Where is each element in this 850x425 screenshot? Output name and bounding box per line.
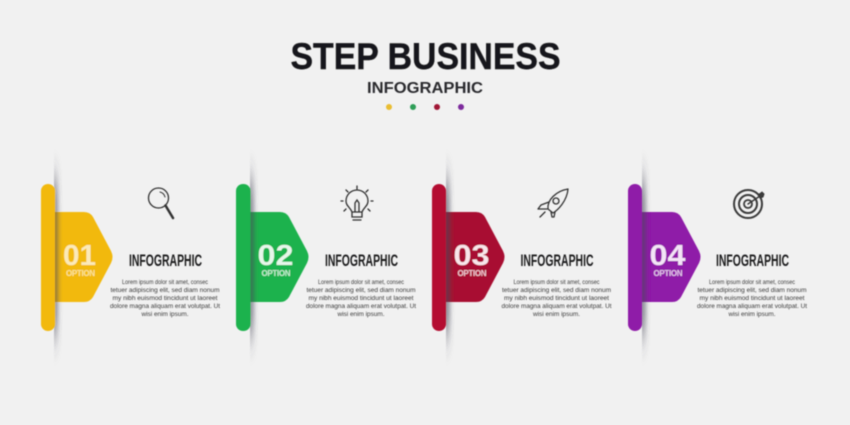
vertical bar — [628, 184, 642, 331]
heading: INFOGRAPHIC — [716, 252, 789, 270]
body text: tetuer adipiscing elit, sed diam nonum — [110, 287, 220, 294]
body text: Lorem ipsum dolor sit amet, consec — [514, 279, 600, 286]
arrow tab — [446, 212, 504, 302]
icon: light bulb — [341, 186, 373, 220]
body text — [502, 279, 612, 318]
body text: Lorem ipsum dolor sit amet, consec — [122, 279, 208, 286]
infographic canvas — [40, 42, 808, 356]
panel: step 01 — [41, 180, 220, 335]
option label: OPTION — [262, 269, 291, 278]
body text: my nibh euismod tincidunt ut laoreet — [504, 295, 609, 302]
title block — [290, 36, 560, 110]
fold shadow — [246, 180, 254, 335]
heading: INFOGRAPHIC — [520, 252, 594, 270]
heading: INFOGRAPHIC — [129, 252, 202, 270]
body text: my nibh euismod tincidunt ut laoreet — [308, 295, 414, 302]
body text: wisi enim ipsum. — [727, 311, 776, 318]
number: 04 — [650, 240, 686, 272]
heading: INFOGRAPHIC — [325, 252, 398, 270]
icon: rocket — [538, 189, 568, 217]
body text: tetuer adipiscing elit, sed diam nonum — [502, 287, 611, 294]
title: STEP BUSINESS — [290, 36, 560, 77]
body text: wisi enim ipsum. — [336, 311, 385, 318]
fold shadow — [442, 180, 450, 335]
panel: step 02 — [236, 180, 416, 335]
body text — [306, 279, 416, 318]
body text: wisi enim ipsum. — [532, 311, 580, 318]
subtitle: INFOGRAPHIC — [367, 80, 483, 97]
vertical bar — [41, 184, 55, 331]
body text: Lorem ipsum dolor sit amet, consec — [709, 279, 795, 286]
vertical bar — [236, 184, 250, 331]
panel: step 03 — [432, 180, 612, 335]
arrow tab — [642, 212, 700, 302]
icon: magnifier — [148, 188, 173, 218]
fold shadow — [638, 180, 646, 335]
arrow tab — [250, 212, 308, 302]
number: 01 — [63, 240, 96, 272]
body text — [110, 279, 220, 318]
colour dots — [386, 104, 464, 110]
body text: wisi enim ipsum. — [140, 311, 189, 318]
vertical bar — [432, 184, 446, 331]
fold shadow — [50, 180, 58, 335]
panel: step 04 — [628, 180, 807, 335]
body text — [697, 279, 807, 318]
number: 03 — [454, 240, 490, 272]
body text: Lorem ipsum dolor sit amet, consec — [318, 279, 404, 286]
body text: dolore magna aliquam erat volutpat. Ut — [110, 303, 220, 310]
body text: dolore magna aliquam erat volutpat. Ut — [697, 303, 807, 310]
body text: tetuer adipiscing elit, sed diam nonum — [306, 287, 416, 294]
body text: dolore magna aliquam erat volutpat. Ut — [502, 303, 612, 310]
body text: tetuer adipiscing elit, sed diam nonum — [698, 287, 806, 294]
option label: OPTION — [654, 269, 683, 278]
body text: my nibh euismod tincidunt ut laoreet — [112, 295, 218, 302]
arrow tab — [54, 212, 112, 302]
body text: dolore magna aliquam erat volutpat. Ut — [306, 303, 416, 310]
body text: my nibh euismod tincidunt ut laoreet — [700, 295, 805, 302]
number: 02 — [258, 240, 294, 272]
option label: OPTION — [458, 269, 487, 278]
option label: OPTION — [66, 269, 95, 278]
icon: target — [734, 190, 764, 218]
